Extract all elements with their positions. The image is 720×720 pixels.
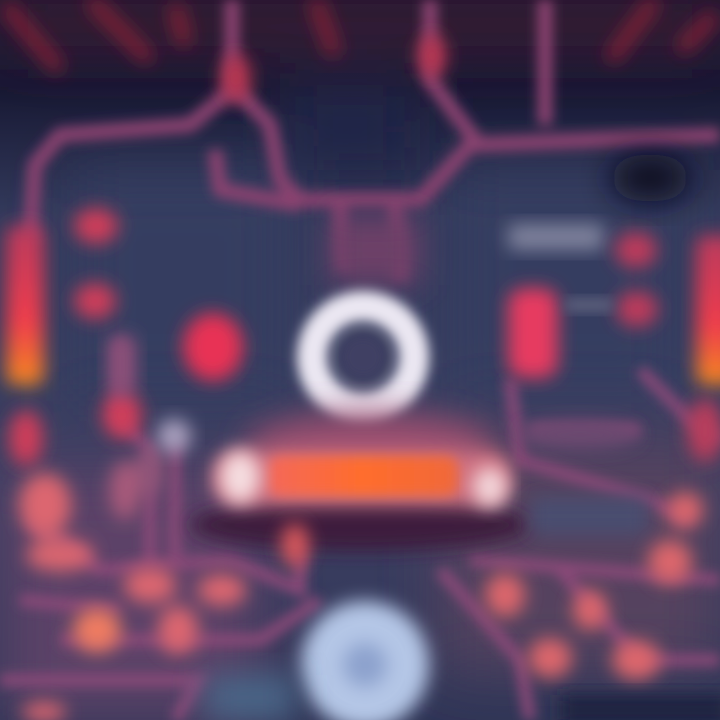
pale blue reflected ring [301, 601, 429, 720]
circuit traces: upper network [30, 0, 720, 280]
bottom right dark block [560, 695, 720, 720]
ring centre [343, 643, 387, 687]
chip white right end [473, 467, 507, 507]
chip dark base [190, 499, 530, 551]
right side bar [696, 235, 720, 385]
pink glow below ring [245, 413, 495, 477]
chip orange glow [268, 456, 458, 496]
left side bar [6, 225, 44, 385]
lower right salmon components [485, 398, 720, 680]
dark spot upper right [610, 154, 690, 202]
central white ring [312, 306, 414, 408]
pale pillar left of chip [157, 419, 191, 453]
circuit nodes on upper traces [221, 34, 446, 102]
right grey panel [530, 497, 648, 535]
red pad left of ring [183, 313, 243, 381]
top red streaks [5, 0, 715, 70]
lower left salmon components [19, 444, 309, 720]
chip white left end [220, 451, 260, 503]
chip pink rim [212, 450, 512, 506]
pink glow above ring [330, 215, 420, 285]
blurred label: upper right [508, 224, 604, 250]
central chip [190, 450, 530, 551]
circuit traces: lower network [0, 340, 720, 720]
pale vertical component [108, 335, 136, 395]
ring glow [301, 601, 429, 720]
blurred label: right middle [565, 298, 613, 312]
left component nodes [9, 208, 142, 466]
lower blue haze [205, 675, 295, 720]
upper right nodes [615, 232, 658, 327]
red bar right of ring [508, 288, 558, 378]
